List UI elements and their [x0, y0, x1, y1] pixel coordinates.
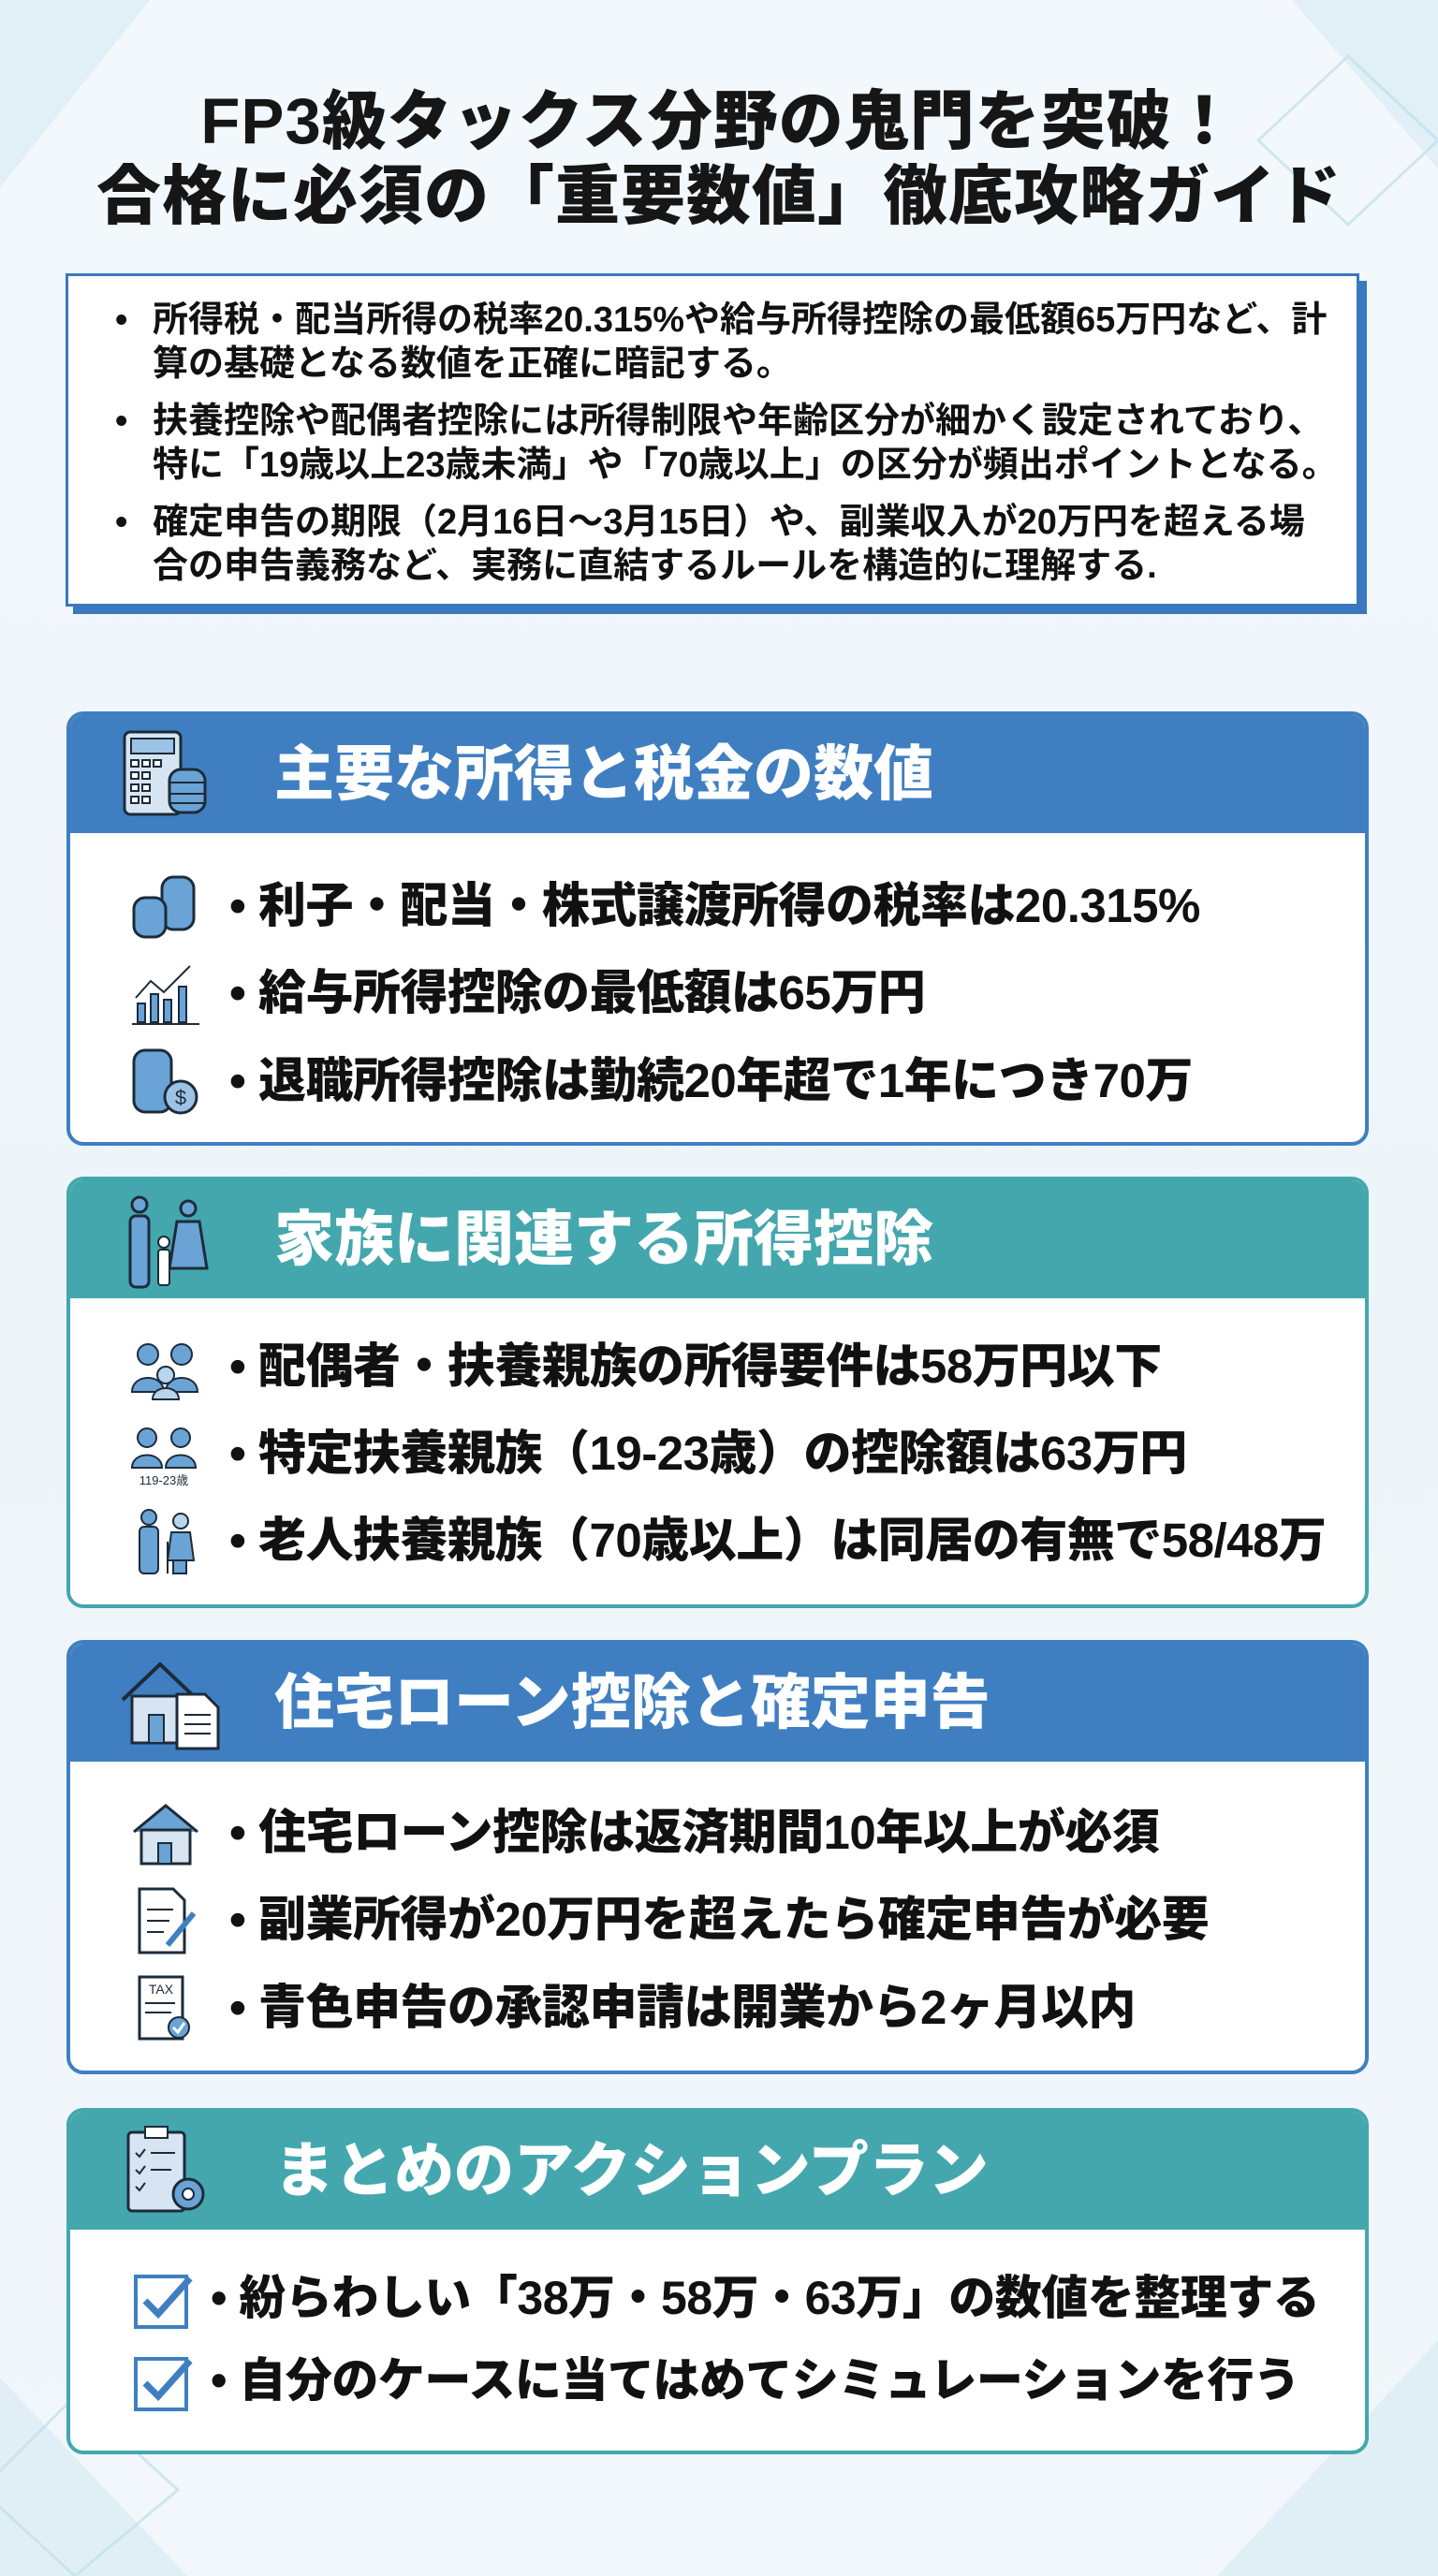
item: 給与所得控除: • 給与所得控除の最低額は65万円 [229, 966, 925, 1019]
header: まとめのアクションプラン [70, 2112, 1365, 2230]
item: 所得要件: • 配偶者・扶養親族の所得要件は58万円以下 [229, 1339, 1162, 1393]
summary box: 算の基礎となる数値を正確に暗記する。 [153, 344, 792, 384]
header: まとめのアクションプラン: まとめのアクションプラン [274, 2137, 989, 2204]
panel: family deductions [66, 1177, 1369, 1608]
header: 住宅ローン控除と確定申告: 住宅ローン控除と確定申告 [274, 1669, 990, 1736]
summary box: 所得税・配当所得の税率20.315%や給与所得控除の最低額65万円など、計 [153, 300, 1327, 340]
item: 青色申告: TAX [149, 1982, 174, 1997]
summary box: 確定申告の期限（2月16日～3月15日）や、副業収入が20万円を超える場 [153, 503, 1305, 542]
title [96, 85, 1342, 232]
panel: housing loan and tax return [66, 1640, 1369, 2074]
item: シミュレーション: • 自分のケースに当てはめてシミュレーションを行う [211, 2354, 1299, 2407]
panel: income and tax numbers [66, 711, 1369, 1146]
summary box: 扶養控除や配偶者控除には所得制限や年齢区分が細かく設定されており、 [153, 402, 1323, 441]
title: 合格に必須の「重要数値」徹底攻略ガイド [96, 160, 1342, 232]
summary box: 特に「19歳以上23歳未満」や「70歳以上」の区分が頻出ポイントとなる。 [153, 446, 1338, 485]
header: 住宅ローン控除と確定申告 [70, 1644, 1365, 1762]
item: 退職所得控除: • 退職所得控除は勤続20年超で1年につき70万 [229, 1054, 1193, 1107]
item: 特定扶養親族: 119-23歳 [139, 1473, 188, 1487]
item: 退職所得控除: $ [175, 1086, 186, 1109]
item: 青色申告: • 青色申告の承認申請は開業から2ヶ月以内 [229, 1981, 1136, 2034]
summary box [66, 273, 1359, 607]
header: 主要な所得と税金の数値: 主要な所得と税金の数値 [274, 740, 933, 808]
header: 家族に関連する所得控除 [70, 1180, 1365, 1298]
item: 特定扶養親族: • 特定扶養親族（19-23歳）の控除額は63万円 [229, 1427, 1187, 1480]
item: 老人扶養親族: • 老人扶養親族（70歳以上）は同居の有無で58/48万 [229, 1514, 1326, 1567]
header: 主要な所得と税金の数値 [70, 715, 1365, 833]
title: FP3級タックス分野の鬼門を突破！ [200, 85, 1238, 157]
panel: action plan [66, 2108, 1369, 2454]
item: 住宅ローン控除: • 住宅ローン控除は返済期間10年以上が必須 [229, 1806, 1159, 1859]
header: 家族に関連する所得控除: 家族に関連する所得控除 [274, 1206, 933, 1273]
item: 副業所得: • 副業所得が20万円を超えたら確定申告が必要 [229, 1893, 1209, 1946]
summary box: 合の申告義務など、実務に直結するルールを構造的に理解する. [153, 547, 1157, 586]
item: 税率: • 利子・配当・株式譲渡所得の税率は20.315% [229, 879, 1200, 932]
item: 数値を整理: • 紛らわしい「38万・58万・63万」の数値を整理する [211, 2272, 1319, 2324]
